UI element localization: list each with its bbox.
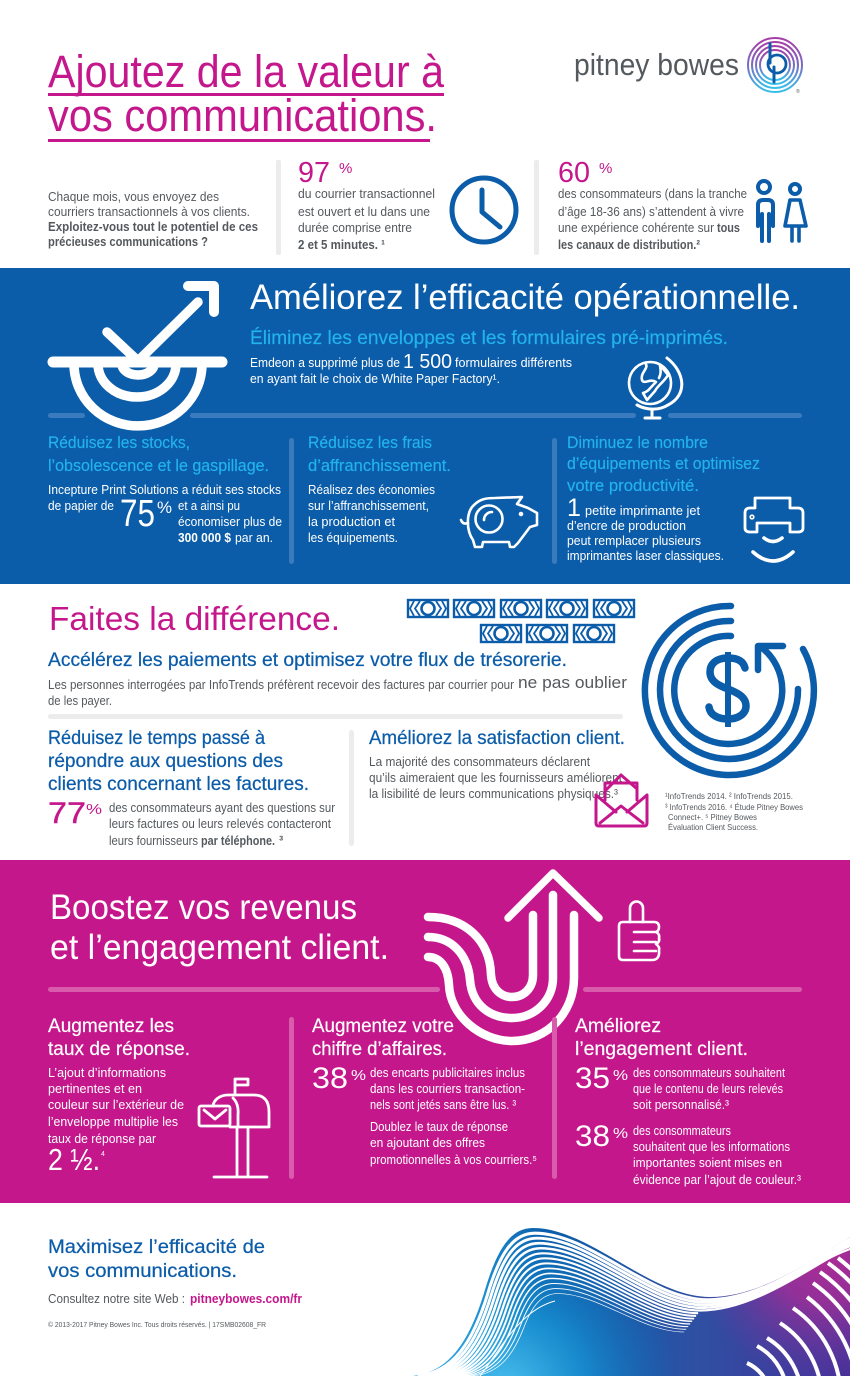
column: engagement client: Améliorez: [575, 1016, 661, 1037]
stat: 60 %: une expérience cohérente sur: [558, 221, 714, 235]
column: taux de réponse: l’enveloppe multiplie les: [48, 1115, 178, 1129]
footnotes: ³ InfoTrends 2016. ⁴ Étude Pitney Bowes: [665, 802, 803, 812]
column: taux de réponse: taux de réponse par: [48, 1132, 156, 1146]
column: stocks: de papier de: [48, 499, 114, 513]
column: engagement client: soit personnalisé.³: [633, 1098, 729, 1112]
column: stocks: Incepture Print Solutions a réduit ses stocks: [48, 483, 281, 497]
heading: efficacité: Améliorez l’efficacité opérationnelle.: [250, 278, 800, 317]
panel: efficacité opérationnelle: [0, 268, 850, 584]
stat: 60 %: [558, 157, 747, 252]
title: Ajoutez de la valeur à: [48, 46, 445, 97]
column: chiffre d'affaires: en ajoutant des offres: [370, 1136, 485, 1150]
column: engagement client: %: [613, 1125, 628, 1142]
footer website: Consultez notre site Web :: [48, 1292, 185, 1306]
column: engagement client: [575, 1016, 801, 1187]
column: chiffre d'affaires: [312, 1016, 537, 1167]
footer website: [48, 1292, 302, 1306]
column: affranchissement: d’affranchissement.: [308, 456, 451, 475]
text: Emdeon: en ayant fait le choix de White Paper Factory¹.: [250, 372, 500, 386]
copyright: © 2013-2017 Pitney Bowes Inc. Tous droits réservés. | 17SMB02608_FR: [48, 1321, 266, 1329]
footnotes: Connect+. ⁵ Pitney Bowes: [668, 812, 757, 822]
column: factures: clients concernant les factures.: [48, 773, 309, 795]
column: factures: des consommateurs ayant des questions sur: [109, 801, 335, 815]
column: factures: par téléphone.: [201, 834, 275, 848]
text: InfoTrends factures: ne pas oublier: [518, 673, 627, 692]
icon: thumbs up: [619, 902, 659, 960]
column: chiffre d'affaires: Augmentez votre: [312, 1016, 454, 1037]
column: affranchissement: Réduisez les frais: [308, 433, 432, 452]
column: taux de réponse: Augmentez les: [48, 1016, 174, 1037]
logo: pitney bowes: ®: [796, 88, 800, 95]
column: équipements: imprimantes laser classiques.: [567, 549, 724, 563]
column: taux de réponse: pertinentes et en: [48, 1082, 142, 1096]
footnotes: ¹InfoTrends 2014. ² InfoTrends 2015.: [665, 791, 793, 801]
column: affranchissement: Réalisez des économies: [308, 483, 435, 497]
column: équipements: petite imprimante jet: [585, 504, 701, 518]
footer heading: Maximisez l’efficacité de: [48, 1236, 265, 1258]
column: engagement client: importantes soient mises en: [633, 1156, 782, 1170]
intro text: courriers transactionnels à vos clients.: [48, 205, 250, 219]
stat: 60 %: 60: [558, 157, 590, 189]
text: Emdeon: Emdeon a supprimé plus de: [250, 356, 400, 370]
column: équipements: 1: [567, 494, 581, 522]
column: affranchissement: [308, 433, 451, 545]
stat: 97 %: 97: [298, 157, 330, 189]
icon: check arrow with arcs: [53, 286, 222, 426]
footnotes: Évaluation Client Success.: [668, 822, 758, 832]
column: satisfaction client: la lisibilité de leurs communications physiques.³: [369, 787, 618, 801]
column: factures: %: [86, 801, 102, 818]
column: factures: répondre aux questions des: [48, 750, 283, 772]
column: factures: 77: [48, 797, 86, 830]
column: chiffre d'affaires: promotionnelles à vos courriers.⁵: [370, 1153, 537, 1167]
column: engagement client: 38: [575, 1120, 610, 1153]
column: engagement client: souhaitent que les informations: [633, 1140, 790, 1154]
column: taux de réponse: couleur sur l’extérieur de: [48, 1098, 184, 1112]
column: chiffre d'affaires: dans les courriers transaction-: [370, 1082, 525, 1096]
column: stocks: par an.: [235, 531, 273, 545]
footnotes: [665, 791, 803, 832]
footer heading: [48, 1236, 265, 1282]
column: factures: ³: [279, 834, 283, 848]
column: stocks: [48, 433, 282, 545]
heading: Faites la différence: Faites la différence.: [49, 600, 340, 637]
column: factures: leurs factures ou leurs relevés contacteront: [109, 817, 331, 831]
stat: 97 %: [298, 157, 435, 252]
column: stocks: %: [157, 498, 172, 517]
icon: printer: [745, 498, 803, 561]
column: stocks: 300 000 $: [178, 531, 231, 545]
column: affranchissement: la production et: [308, 515, 396, 529]
stat: 97 %: est ouvert et lu dans une: [298, 205, 430, 219]
column: engagement client: que le contenu de leurs relevés: [633, 1082, 783, 1096]
icon: banknotes: [408, 600, 634, 642]
stat: 60 %: d’âge 18-36 ans) s’attendent à vivre: [558, 205, 744, 219]
stat: 60 %: %: [599, 160, 612, 177]
column: équipements: peut remplacer plusieurs: [567, 534, 701, 548]
column: engagement client: évidence par l’ajout de couleur.³: [633, 1173, 801, 1187]
column: stocks: l’obsolescence et le gaspillage.: [48, 456, 269, 475]
footer website: pitneybowes.com/fr: [190, 1292, 302, 1306]
column: chiffre d'affaires: Doublez le taux de réponse: [370, 1120, 508, 1134]
stat: 97 %: %: [339, 160, 352, 177]
column: engagement client: l’engagement client.: [575, 1039, 748, 1060]
column: stocks: économiser plus de: [178, 515, 282, 529]
text: Emdeon: 1 500: [403, 351, 452, 373]
column: stocks: et a ainsi pu: [178, 499, 240, 513]
text: InfoTrends factures: Les personnes interrogées par InfoTrends préfèrent recevoir des factures par courrier pour: [48, 678, 514, 692]
intro text: précieuses communications ?: [48, 235, 208, 249]
text: Emdeon: [250, 351, 572, 386]
intro text: Exploitez-vous tout le potentiel de ces: [48, 220, 258, 234]
intro text: Chaque mois, vous envoyez des: [48, 190, 219, 204]
column: équipements: d’encre de production: [567, 519, 686, 533]
column: stocks: 75: [120, 493, 155, 535]
icon: people: [758, 181, 806, 241]
icon: clock: [452, 178, 516, 242]
column: taux de réponse: L’ajout d’informations: [48, 1066, 166, 1080]
title: [48, 46, 445, 142]
heading: boostez: [50, 888, 389, 967]
footer heading: vos communications.: [48, 1260, 237, 1282]
stat: 60 %: des consommateurs (dans la tranche: [558, 187, 747, 201]
column: chiffre d'affaires: nels sont jetés sans être lus. ³: [370, 1098, 516, 1112]
subheading: paiements: Accélérez les paiements et optimisez votre flux de trésorerie.: [48, 649, 567, 671]
column: chiffre d'affaires: des encarts publicitaires inclus: [370, 1066, 525, 1080]
stat: 97 %: durée comprise entre: [298, 221, 412, 235]
icon: piggy bank: [461, 497, 537, 547]
panel: revenus et engagement: [0, 860, 850, 1203]
subheading: enveloppes: Éliminez les enveloppes et les formulaires pré-imprimés.: [250, 326, 728, 349]
graphic: wave: [413, 1197, 850, 1376]
icon: open envelope: [596, 775, 647, 826]
column: engagement client: des consommateurs: [633, 1124, 731, 1138]
icon: up arrow curves: [428, 873, 599, 1041]
icon: mailbox: [199, 1079, 269, 1177]
column: affranchissement: sur l’affranchissement,: [308, 499, 429, 513]
text: InfoTrends factures: de les payer.: [48, 694, 112, 708]
column: satisfaction client: qu’ils aimeraient que les fournisseurs améliorent: [369, 771, 622, 785]
icon: globe: [629, 358, 682, 418]
column: taux de réponse: 2 ½.: [48, 1142, 100, 1177]
stat: 60 %: les canaux de distribution.²: [558, 238, 700, 252]
stat: 97 %: 2 et 5 minutes. ¹: [298, 238, 385, 252]
column: factures: leurs fournisseurs: [109, 834, 198, 848]
column: engagement client: 35: [575, 1062, 610, 1095]
column: satisfaction client: [369, 727, 625, 801]
logo: pitney bowes: pitney bowes: [574, 47, 739, 82]
column: factures: Réduisez le temps passé à: [48, 727, 265, 749]
column: factures: [48, 727, 335, 848]
column: équipements: Diminuez le nombre: [567, 433, 708, 452]
stat: 97 %: du courrier transactionnel: [298, 187, 435, 201]
title: vos communications.: [48, 90, 437, 141]
stat: 60 %: tous: [717, 221, 740, 235]
column: engagement client: %: [613, 1067, 628, 1084]
column: satisfaction client: Améliorez la satisfaction client.: [369, 727, 625, 749]
intro text: [48, 190, 258, 249]
text: Emdeon: formulaires différents: [455, 356, 572, 370]
column: équipements: [567, 433, 760, 563]
text: InfoTrends factures: [48, 673, 627, 708]
icon: dollar cycle: [645, 606, 814, 775]
column: taux de réponse: taux de réponse.: [48, 1039, 190, 1060]
column: satisfaction client: La majorité des consommateurs déclarent: [369, 755, 590, 769]
heading: boostez: Boostez vos revenus: [50, 888, 357, 927]
heading: boostez: et l’engagement client.: [50, 928, 389, 967]
column: chiffre d'affaires: chiffre d’affaires.: [312, 1039, 447, 1060]
logo: pitney bowes: [574, 38, 802, 95]
column: affranchissement: les équipements.: [308, 531, 398, 545]
column: équipements: votre productivité.: [567, 476, 699, 495]
column: chiffre d'affaires: %: [351, 1067, 366, 1084]
column: engagement client: des consommateurs souhaitent: [633, 1066, 785, 1080]
column: équipements: d’équipements et optimisez: [567, 454, 760, 473]
column: stocks: Réduisez les stocks,: [48, 433, 190, 452]
column: taux de réponse: 4: [101, 1151, 105, 1158]
column: taux de réponse: [48, 1016, 190, 1177]
column: chiffre d'affaires: 38: [312, 1062, 348, 1095]
